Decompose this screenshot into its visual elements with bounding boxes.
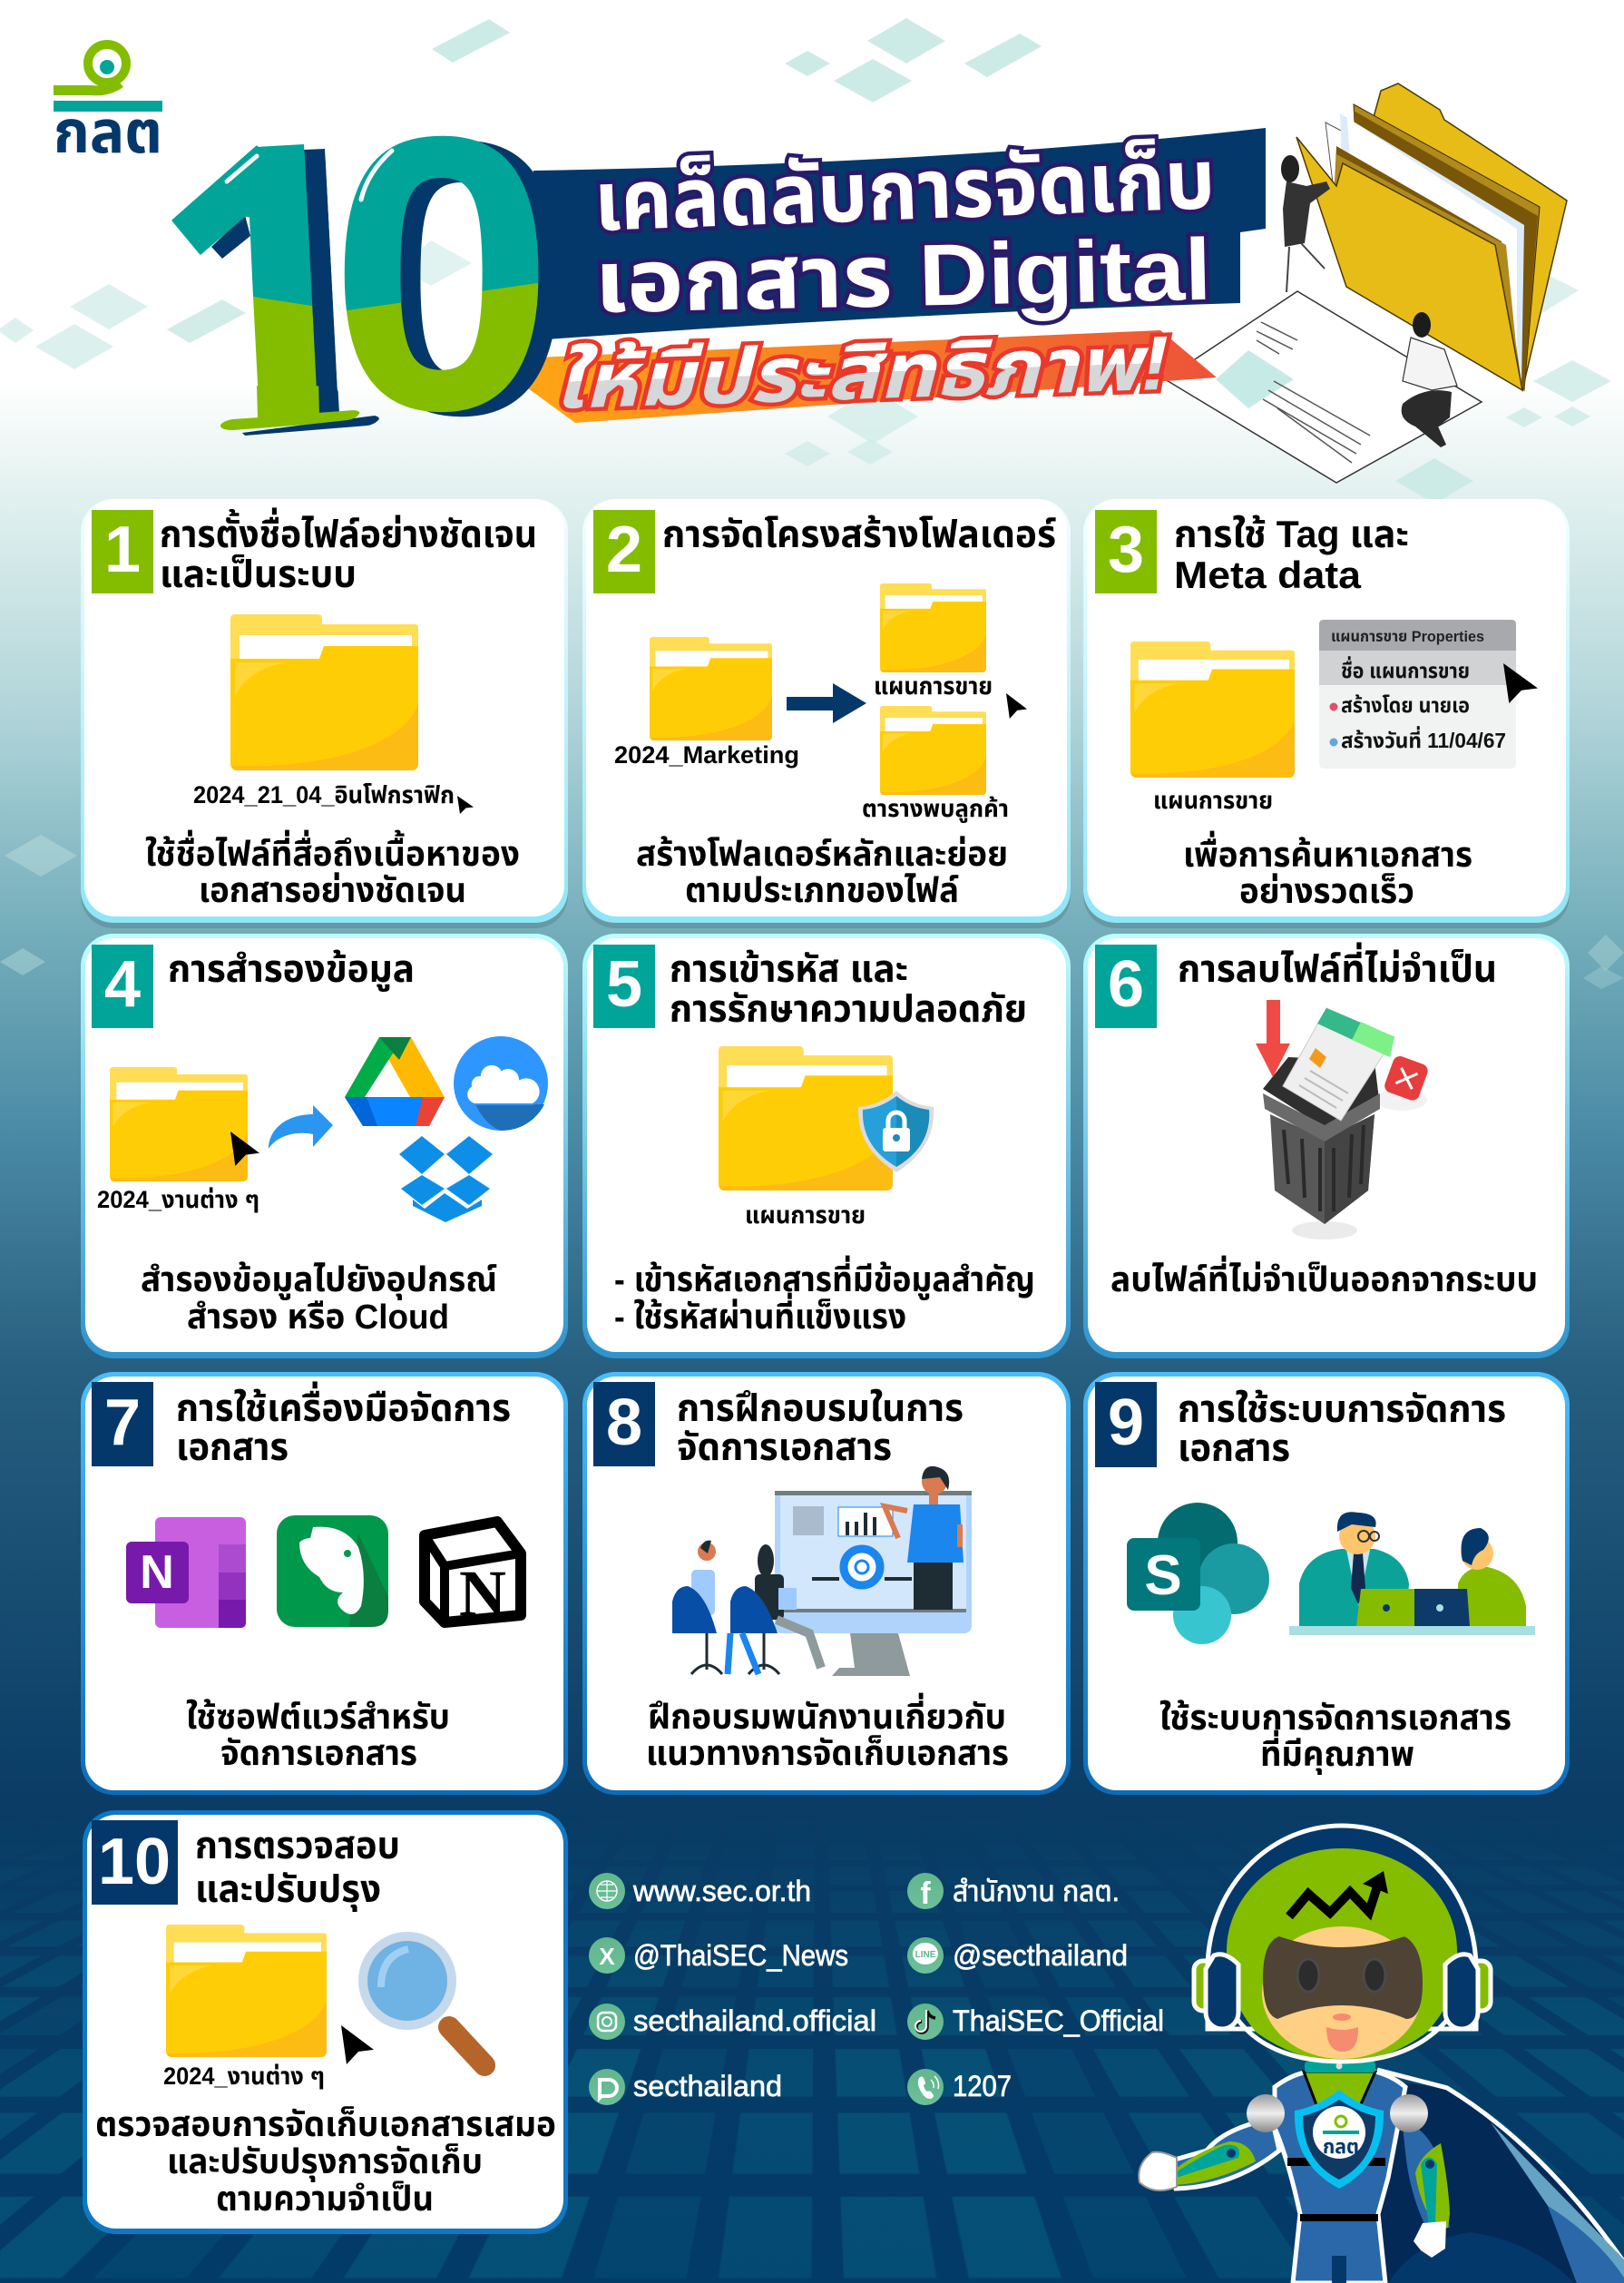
- digit 1: [171, 144, 379, 436]
- panel 6: delete files: การลบไฟล์ที่ไม่จำเป็น: [1178, 942, 1497, 990]
- panel 5: encryption: 5: [606, 948, 642, 1021]
- panel 2: folder structure: ตารางพบลูกค้า: [862, 795, 1009, 823]
- mascot: [1139, 1826, 1624, 2283]
- icon: X: X: [599, 1943, 615, 1970]
- panel 6: delete files: [1083, 934, 1570, 1358]
- arrow: [787, 683, 866, 723]
- icon: sub folder bottom: [880, 706, 986, 795]
- contact list: [589, 1873, 1164, 2105]
- icon: Notion: [425, 1522, 521, 1630]
- contact list: ThaiSEC_Official: [953, 2004, 1164, 2037]
- panel 4: backup: การสำรองข้อมูล: [168, 947, 415, 992]
- digit 1: 1: [153, 67, 396, 511]
- panel 10: review and improve: [83, 1810, 568, 2234]
- icon: cursor: [230, 1132, 259, 1166]
- arrow: curved: [269, 1105, 333, 1149]
- panel 10: review and improve: และปรับปรุงการจัดเก็บ: [167, 2143, 483, 2182]
- panel 2: folder structure: การจัดโครงสร้างโฟลเดอร์: [662, 513, 1056, 555]
- panel 4: backup: [81, 934, 568, 1358]
- icon: folder: [110, 1067, 248, 1181]
- panel 8: training: [582, 1372, 1071, 1795]
- panel 3: tags and meta data: แผนการขาย: [1153, 787, 1273, 814]
- panel 5: encryption: - เข้ารหัสเอกสารที่มีข้อมูลสำคัญ: [614, 1255, 1035, 1300]
- logo: SEC: [54, 44, 162, 165]
- panel 3: tags and meta data: Meta data: [1174, 554, 1362, 596]
- panel 5: encryption: - ใช้รหัสผ่านที่แข็งแรง: [614, 1292, 906, 1337]
- panel 8: training: แนวทางการจัดเก็บเอกสาร: [646, 1735, 1009, 1773]
- title line 3: ให้มีประสิทธิภาพ!: [553, 320, 1170, 425]
- icon: folder: [719, 1046, 893, 1190]
- banner ribbon navy: [533, 128, 1266, 340]
- icon: secthailand chat: [589, 2069, 625, 2105]
- icon: Google Drive: [345, 1037, 445, 1126]
- panel 2: folder structure: แผนการขาย: [874, 672, 993, 700]
- panel 10: review and improve: 10: [98, 1826, 171, 1898]
- icon: phone: [907, 2069, 944, 2105]
- panel 8: training: ฝึกอบรมพนักงานเกี่ยวกับ: [648, 1692, 1006, 1737]
- big number 10: [171, 136, 553, 436]
- panel 8: training: การฝึกอบรมในการ: [677, 1386, 964, 1429]
- panel 7: tools: ใช้ซอฟต์แวร์สำหรับ: [186, 1699, 450, 1737]
- icon: instagram: [589, 2004, 625, 2040]
- digit 0: 0: [348, 61, 575, 496]
- panel 9: document management system: การใช้ระบบการจัดการ: [1178, 1387, 1506, 1430]
- contact list: secthailand.official: [633, 2004, 876, 2037]
- panel 10: review and improve: การตรวจสอบ: [195, 1824, 400, 1867]
- panel 2: folder structure: สร้างโฟลเดอร์หลักและย่อย: [636, 836, 1008, 874]
- panel 1: naming: และเป็นระบบ: [160, 553, 357, 595]
- figure: man sitting: [1402, 312, 1457, 447]
- panel 1: naming: 2024_21_04_อินโฟกราฟิก: [193, 781, 455, 808]
- icon: LINE: [907, 1937, 944, 1974]
- panel 9: document management system: [1083, 1372, 1570, 1795]
- icon: LINE: LINE: [915, 1950, 936, 1960]
- icon: shield: [858, 1091, 934, 1172]
- icon: X: [589, 1937, 625, 1974]
- panel 5: encryption: การเข้ารหัส และ: [670, 947, 908, 990]
- panel 1: naming: 1: [104, 514, 141, 586]
- panel 3: tags and meta data: การใช้ Tag และ: [1174, 513, 1409, 555]
- icon: SharePoint: [1127, 1503, 1269, 1644]
- icon: sub folder top: [880, 583, 986, 672]
- contact list: สำนักงาน กลต.: [953, 1875, 1120, 1907]
- panel 3: tags and meta data: อย่างรวดเร็ว: [1239, 873, 1414, 911]
- illustration: folder with people: [1165, 83, 1567, 483]
- panel 2: folder structure: [582, 499, 1071, 928]
- properties panel: สร้างโดย นายเอ: [1341, 693, 1470, 717]
- logo: SEC: กลต: [54, 98, 162, 165]
- icon: magnifier: [358, 1932, 493, 2072]
- panel 6: delete files: ลบไฟล์ที่ไม่จำเป็นออกจากระบบ: [1110, 1255, 1538, 1299]
- title line 2: เอกสาร Digital: [593, 221, 1212, 331]
- icon: cursor: [1503, 663, 1538, 703]
- background diamonds: [0, 18, 1624, 989]
- properties panel: [1319, 620, 1516, 769]
- panel 8: training: จัดการเอกสาร: [677, 1426, 892, 1468]
- panel 1: naming: [81, 499, 568, 928]
- panel 8: training: 8: [606, 1386, 642, 1459]
- panel 4: backup: 2024_งานต่าง ๆ: [97, 1186, 259, 1213]
- panel 5: encryption: การรักษาความปลอดภัย: [670, 987, 1027, 1030]
- mascot arms: [1139, 2119, 1450, 2258]
- panel 3: tags and meta data: [1083, 499, 1570, 928]
- panel 1: naming: การตั้งชื่อไฟล์อย่างชัดเจน: [160, 507, 537, 555]
- panel 2: folder structure: ตามประเภทของไฟล์: [685, 872, 959, 910]
- icon: facebook: [907, 1873, 944, 1911]
- panel 3: tags and meta data: เพื่อการค้นหาเอกสาร: [1183, 830, 1472, 875]
- panel 1: naming: เอกสารอย่างชัดเจน: [199, 872, 466, 910]
- panel 7: tools: จัดการเอกสาร: [220, 1735, 417, 1773]
- panel 5: encryption: [582, 934, 1071, 1358]
- panel 6: delete files: 6: [1108, 948, 1144, 1021]
- panel 3: tags and meta data: 3: [1108, 514, 1144, 586]
- icon: folder: [1130, 642, 1295, 778]
- icon: Dropbox: [399, 1136, 493, 1222]
- panel 4: backup: 4: [104, 948, 141, 1021]
- panel 5: encryption: แผนการขาย: [745, 1201, 866, 1229]
- panel 10: review and improve: และปรับปรุง: [195, 1867, 381, 1912]
- contact list: 1207: [953, 2070, 1012, 2102]
- icon: cursor: [341, 2025, 374, 2064]
- panel 7: tools: [81, 1372, 568, 1795]
- properties panel: สร้างวันที่ 11/04/67: [1341, 726, 1506, 752]
- icon: SharePoint: S: [1144, 1544, 1182, 1607]
- contact list: @ThaiSEC_News: [633, 1939, 848, 1972]
- mascot head with headset: [1194, 1826, 1491, 2062]
- panel 9: document management system: ที่มีคุณภาพ: [1260, 1729, 1414, 1775]
- panel 7: tools: การใช้เครื่องมือจัดการ: [176, 1381, 511, 1429]
- icon: document: [1283, 1008, 1394, 1121]
- panel 9: document management system: เอกสาร: [1178, 1426, 1290, 1469]
- icon: OneNote: N: [140, 1546, 174, 1599]
- panel 1: naming: ใช้ชื่อไฟล์ที่สื่อถึงเนื้อหาของ: [145, 829, 520, 874]
- panel 10: review and improve: 2024_งานต่าง ๆ: [163, 2063, 325, 2090]
- icon: facebook: f: [920, 1876, 931, 1911]
- panel 10: review and improve: ตามความจำเป็น: [216, 2180, 434, 2219]
- panel 2: folder structure: 2024_Marketing: [614, 741, 799, 769]
- icon: website: [589, 1873, 625, 1909]
- icon: OneNote: [126, 1517, 246, 1628]
- figure: woman standing: [1281, 155, 1330, 292]
- panel 4: backup: สำรอง หรือ Cloud: [187, 1298, 449, 1337]
- icon: tiktok: [907, 2004, 944, 2040]
- icon: trash can: [1263, 1057, 1427, 1239]
- icon: delete badge: [1383, 1054, 1430, 1102]
- mascot shield badge: กลต: [1323, 2135, 1359, 2158]
- background perspective tiles: [0, 1907, 1624, 2278]
- panel 7: tools: เอกสาร: [176, 1426, 289, 1468]
- icon: red arrow: [1256, 1000, 1290, 1077]
- title line 1: เคล็ดลับการจัดเก็บ: [592, 133, 1217, 249]
- digit 0: 0: [328, 56, 555, 492]
- properties panel: แผนการขาย Properties: [1331, 628, 1484, 645]
- icon: Notion: N: [459, 1557, 506, 1630]
- icon: cloud: [454, 1036, 548, 1131]
- contact list: @secthailand: [953, 1939, 1128, 1972]
- mascot cape: [1361, 2070, 1624, 2283]
- digit 1: 1: [174, 72, 417, 515]
- icon: folder: [230, 614, 418, 770]
- icon: folder: [166, 1925, 327, 2057]
- mascot body: [1247, 2062, 1428, 2283]
- panel 9: document management system: 9: [1108, 1386, 1144, 1459]
- ribbon orange: [528, 330, 1217, 423]
- panel 7: tools: 7: [104, 1386, 141, 1459]
- panel 10: review and improve: ตรวจสอบการจัดเก็บเอกสารเสมอ: [95, 2106, 556, 2144]
- icon: cursor: [1006, 693, 1027, 719]
- icon: Evernote: [277, 1515, 388, 1627]
- illustration: training room: [672, 1466, 972, 1676]
- panel 9: document management system: ใช้ระบบการจัดการเอกสาร: [1159, 1700, 1511, 1738]
- panel 2: folder structure: 2: [606, 514, 642, 586]
- contact list: www.sec.or.th: [632, 1875, 811, 1907]
- properties panel: ชื่อ แผนการขาย: [1341, 656, 1470, 682]
- contact list: secthailand: [633, 2070, 782, 2102]
- icon: main folder: [650, 637, 772, 740]
- illustration: meeting: [1289, 1512, 1535, 1635]
- panel 4: backup: สำรองข้อมูลไปยังอุปกรณ์: [141, 1261, 497, 1300]
- mascot shield badge: [1295, 2090, 1384, 2189]
- icon: cursor: [457, 796, 474, 814]
